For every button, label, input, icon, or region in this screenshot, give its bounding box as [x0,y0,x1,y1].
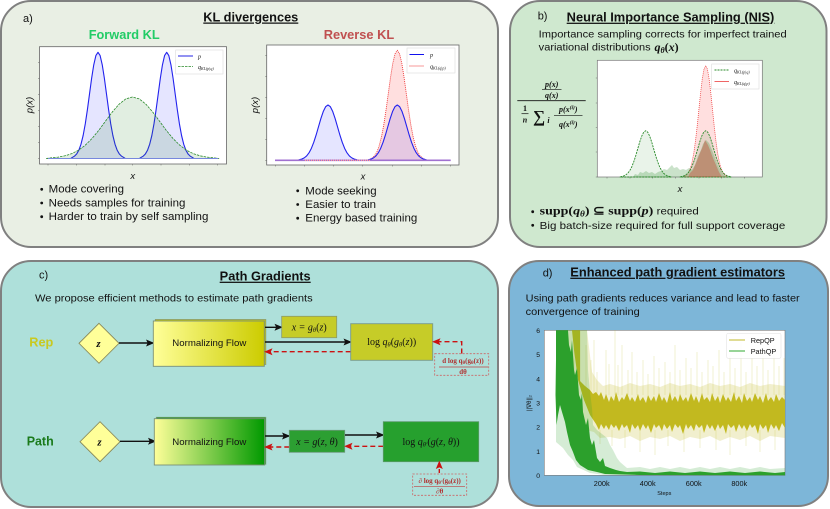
panel b label: b) [538,10,547,22]
axis label x: x [360,172,367,182]
normalizing flow box [153,320,266,366]
log density box: ( [391,337,395,348]
panel b: Neural Importance Sampling [510,1,826,247]
sample box [282,316,337,338]
partial derivative formula: θ [448,481,451,486]
sample box: ( [316,322,320,334]
axis label y: p(x) [24,97,36,114]
formula: importance weight: q(x [559,120,570,129]
sample box: x = g [292,322,313,334]
sample box [289,430,345,452]
input z diamond [80,422,120,462]
formula: importance weight: (i) [570,104,575,111]
row label: Rep: Rep [29,336,54,350]
legend: p [429,53,433,59]
bullet list: forward KL [40,184,208,223]
heading: Path Gradients: Path Gradients [220,270,311,284]
panel a: KL divergences [1,1,498,247]
partial derivative formula: ∂θ [436,488,444,496]
gradient arrow to sample [346,445,383,447]
subheading: Forward KL: Forward KL [89,27,160,42]
log density box: θ [399,342,403,348]
x tick labels: 800k [731,479,748,488]
formula: importance weight: n [523,116,528,125]
RepQP variance envelope [568,330,785,441]
formula: importance weight: 1 [523,104,527,113]
log density box: z)) [406,337,416,348]
formula: importance weight: p(x [559,105,570,114]
legend: q [198,65,201,71]
total derivative formula: dθ [459,368,467,376]
formula: importance weight: ∑ [533,107,545,126]
partial derivative formula: θ′ [438,481,443,486]
formula: importance weight: q(x) [545,91,559,100]
log density box: log q [367,337,388,348]
bullet list: reverse KL: Easier to train [305,199,376,211]
y tick labels: 1 [536,449,540,456]
partial derivative formula: (g [442,477,449,485]
formula: importance weight: ) [574,105,578,114]
log density box: θ [388,342,392,348]
formula: importance weight: (i) [570,119,575,126]
normalizing flow box: Normalizing Flow [172,338,246,349]
panel c: Path Gradients [1,261,498,507]
PathQP variance envelope [556,330,785,475]
arrow: flow to sample [265,326,282,328]
bullet list: reverse KL [296,185,417,225]
gradient arrow to flow [266,446,289,448]
legend: KL(p|q) [736,70,750,74]
y tick labels: 5 [536,352,540,359]
description text: Importance sampling corrects for imperfect trained [539,28,787,40]
legend [407,48,455,73]
bullet list: reverse KL: Mode seeking [305,185,377,197]
y tick labels: 6 [536,328,540,335]
total derivative formula [435,354,489,376]
formula: importance weight: ) [574,120,578,129]
RepQP thin spikes [574,330,784,455]
legend: KL(q|p) [736,81,750,86]
log density box: g(z, θ)) [431,437,460,448]
histogram: red samples [688,140,722,177]
bullet list: reverse KL: Energy based training [305,213,417,225]
bullet list: NIS: Big batch-size required for full support coverage [540,220,785,232]
heading: KL divergences: KL divergences [203,10,298,24]
gradient arrow to log density [434,342,462,354]
flow diagram: Rep [79,316,489,376]
panel a label: a) [23,13,33,25]
log density box [383,422,479,462]
y tick labels: 4 [536,376,540,383]
axis label y: p(x) [250,97,261,114]
formula: importance weight: i [547,116,550,125]
histogram: green samples [633,140,727,177]
description text: variational distributions [539,42,651,54]
x tick labels: 400k [640,479,656,488]
chart: reverse KL densities [250,45,459,182]
normalizing flow box [154,417,266,465]
gradient arrow to log density [438,462,440,473]
arrow: sample to log density [345,434,383,436]
legend: q [430,64,433,70]
log density box: log q [402,437,423,448]
panel d label: d) [543,268,552,280]
partial derivative formula [413,474,467,496]
total derivative formula: (z)) [474,357,484,365]
total derivative formula: (g [465,357,471,365]
legend: q [734,80,737,86]
heading: estimators: Enhanced path gradient estimators [570,266,785,280]
description text: Using path gradients reduces variance and lead to faster [526,293,800,305]
bullet list: NIS: required [657,205,699,217]
legend: KL(q|p) [432,66,446,70]
PathQP main band [556,330,785,475]
bullet list: NIS: θ [580,210,586,218]
y tick labels [536,328,540,480]
x tick labels: 600k [686,479,702,488]
description text: We propose efficient methods to estimate path gradients [35,293,313,305]
y tick labels: 0 [536,473,540,480]
flow diagram: Path [80,417,479,496]
input z diamond: z [96,436,102,448]
bullet list: forward KL: Needs samples for training [49,197,185,209]
arrow: flow to sample [265,435,289,437]
y tick labels: 3 [536,400,540,408]
sample box: x = g(z, θ) [295,437,338,448]
bullet list: NIS [531,204,785,232]
legend: RepQP [751,336,775,345]
row label: Path: Path [27,435,54,449]
bullet list: NIS: supp( q [540,204,579,218]
y tick labels: 2 [536,425,540,432]
normalizing flow box: Normalizing Flow [172,437,246,448]
legend: q [734,68,737,74]
log density box: ( [402,337,406,348]
input z diamond: z [95,338,101,350]
partial derivative formula: ∂ log q [418,477,438,485]
description text: q [654,40,660,54]
panel c label: c) [39,270,48,282]
description text [539,28,787,55]
arrow: z to flow [120,440,155,442]
partial derivative formula: (z)) [451,477,462,485]
description text: ( [665,40,669,54]
x tick labels [594,479,748,488]
legend [712,64,759,89]
sample box: z) [319,322,327,334]
formula: importance weight [517,80,586,129]
chart: importance sampling histogram [596,60,762,195]
axis label x: x [129,171,136,182]
input z diamond [79,323,119,363]
line chart: gradient norm over steps [526,328,785,497]
total derivative formula: θ [471,361,474,366]
x tick labels: 200k [594,479,610,488]
total derivative formula: d log q [442,357,463,365]
log density box [351,324,433,360]
arrow: z to flow [119,342,153,344]
heading: NIS: Neural Importance Sampling (NIS) [567,11,774,25]
total derivative formula: θ [463,361,466,366]
y axis label: ||∇θ||₂ [526,394,533,411]
legend: KL(p|q) [200,66,214,71]
bullet list: forward KL: Harder to train by self sampling [49,211,208,223]
panel d: Enhanced path gradient estimators [509,261,828,506]
description text: convergence of training [526,306,640,318]
description text [526,293,800,318]
chart: forward KL densities [24,47,226,182]
log density box: ( [427,437,431,448]
x axis label: Steps [657,491,672,497]
description text: θ [660,46,666,55]
legend: p [197,54,201,60]
legend [176,50,223,74]
bullet list: NIS: p) [642,204,653,218]
log density box: θ′ [423,442,428,448]
legend: PathQP [751,347,776,356]
arrow: flow to log density [265,341,350,343]
subheading: Reverse KL: Reverse KL [324,27,394,42]
RepQP main band [572,330,785,434]
bullet list: NIS: ) ⊆ supp( [585,204,642,218]
sample box: θ [313,327,317,334]
log density box: g [394,337,399,348]
bullet list: forward KL: Mode covering [49,184,124,196]
gradient arrow back to flow [266,351,351,353]
axis label x: x [677,184,684,195]
description text: x) [669,40,679,54]
legend [727,333,781,358]
formula: importance weight: p(x) [544,80,559,89]
